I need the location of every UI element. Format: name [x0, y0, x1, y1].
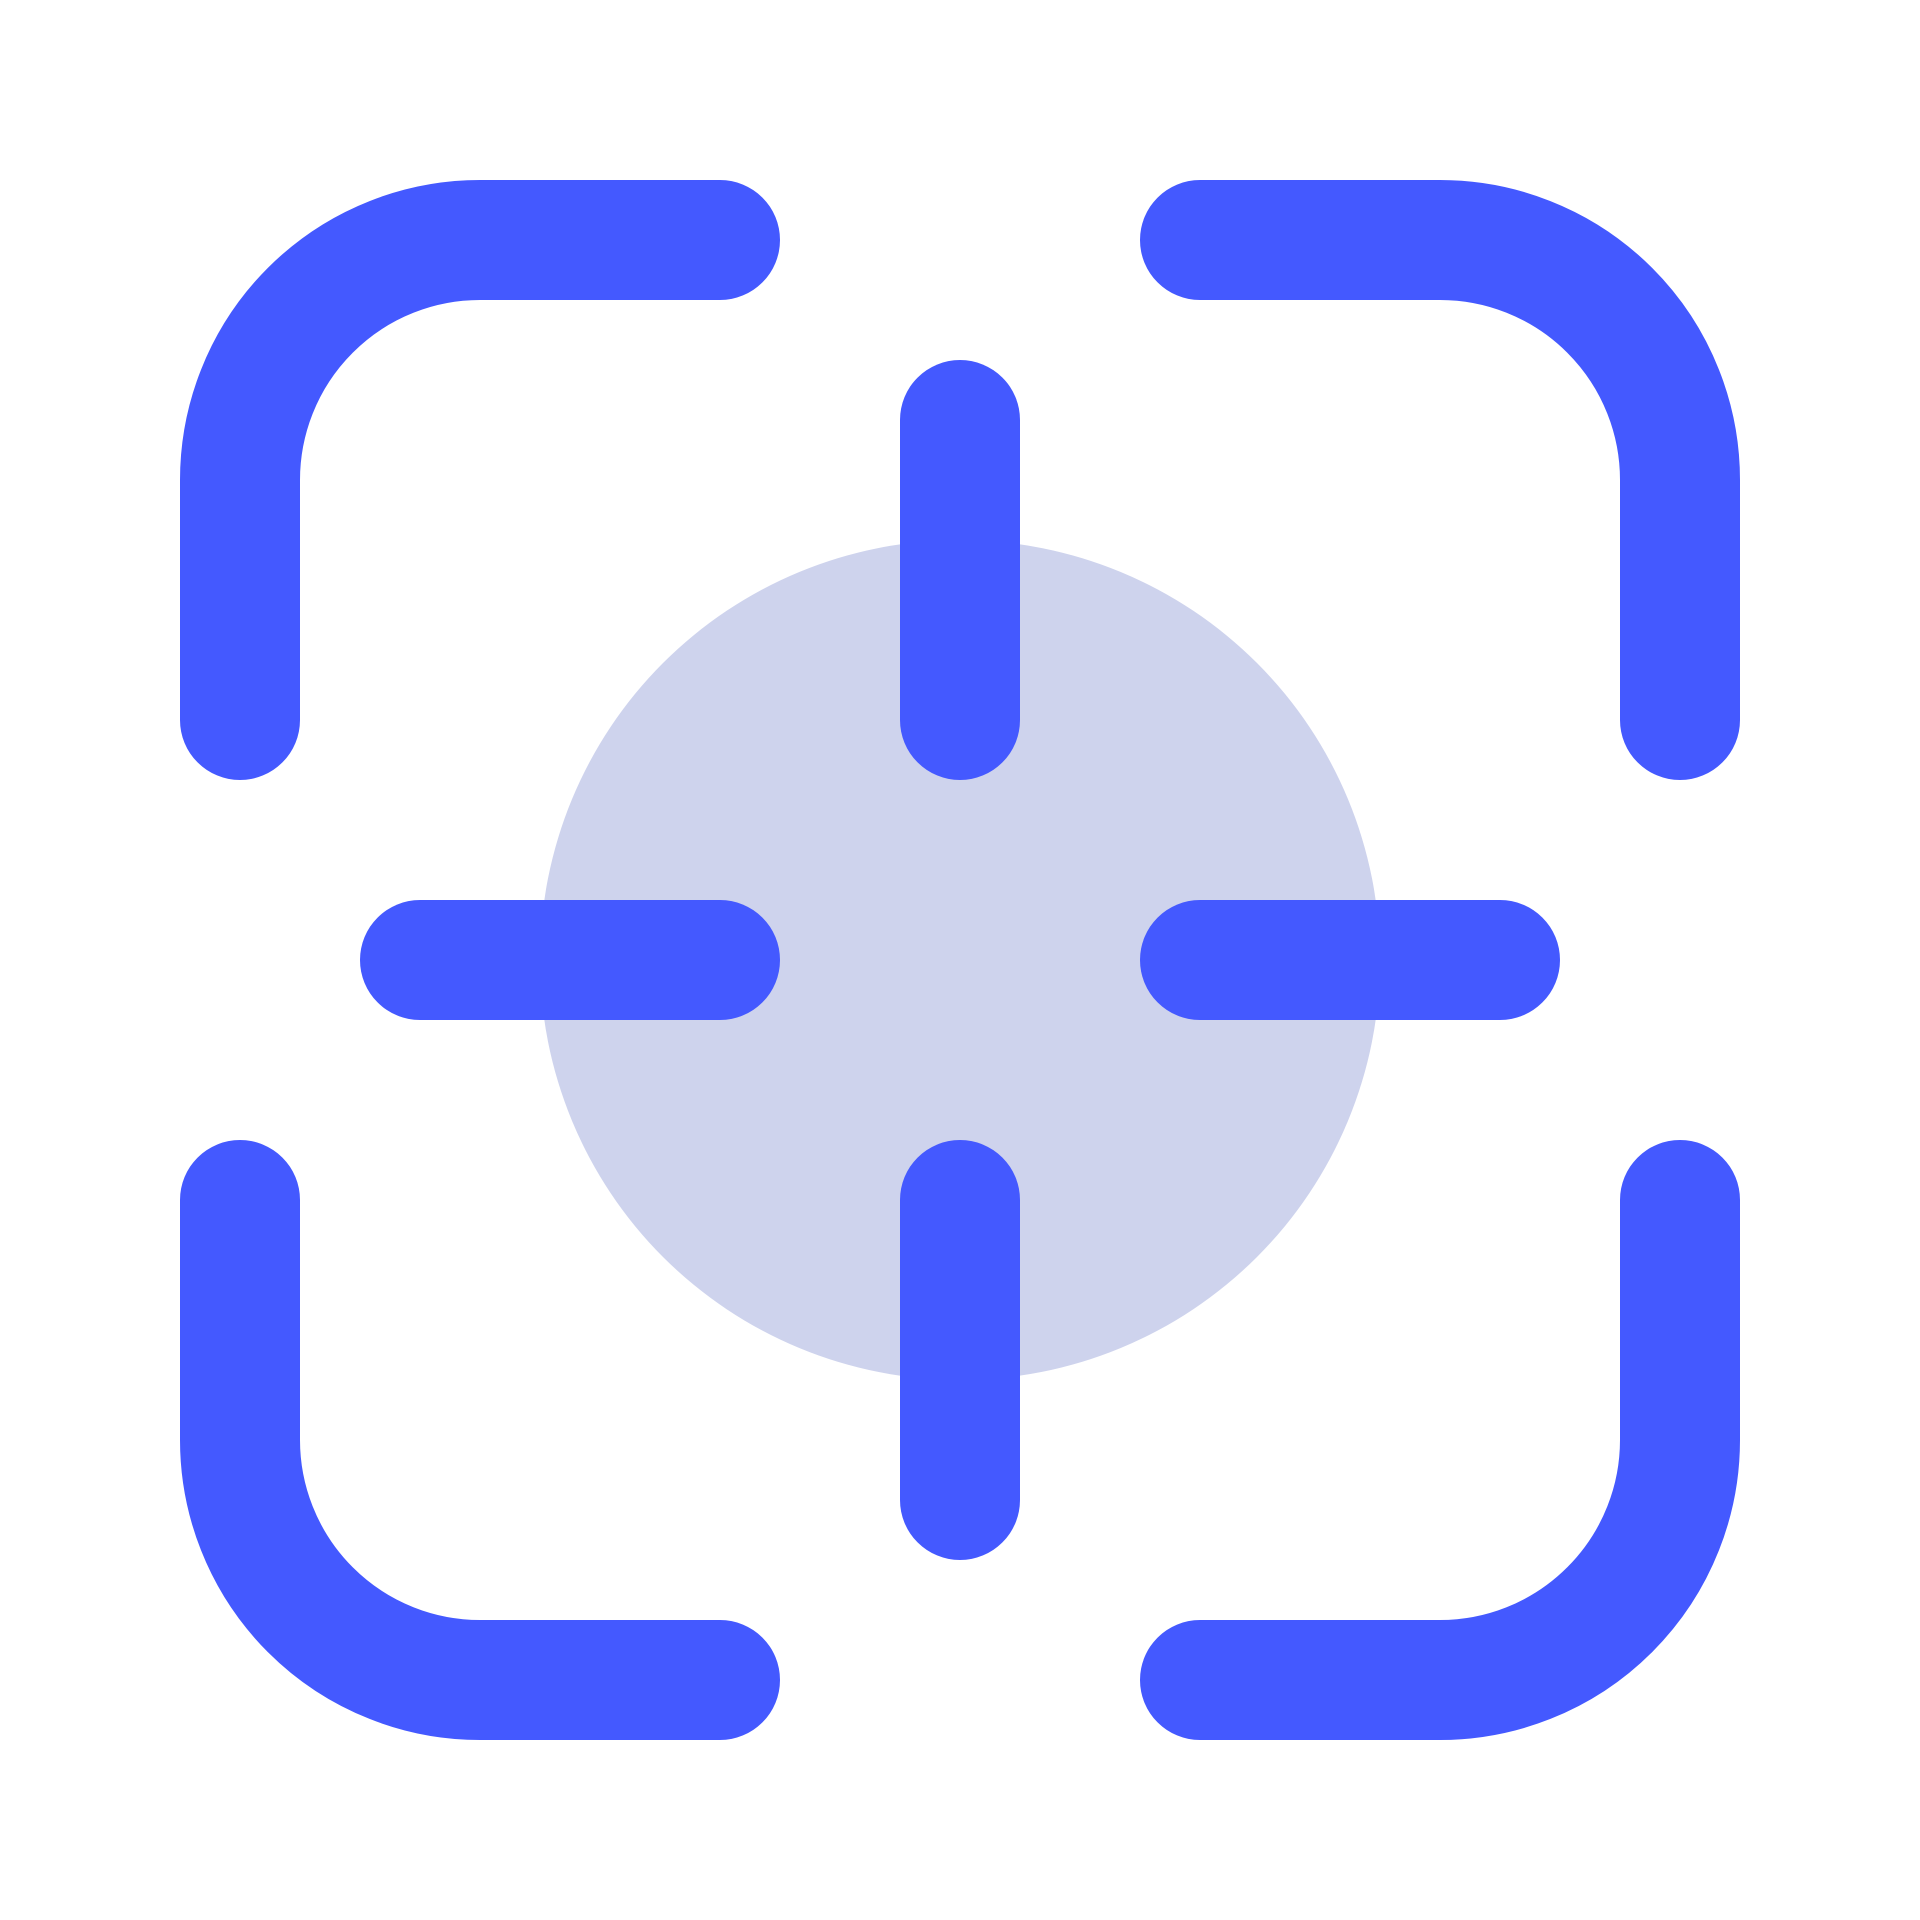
icon: crosshair ticks	[420, 420, 1500, 1500]
icon: viewfinder corners	[240, 240, 1680, 1680]
icon: center circle	[540, 540, 1380, 1380]
